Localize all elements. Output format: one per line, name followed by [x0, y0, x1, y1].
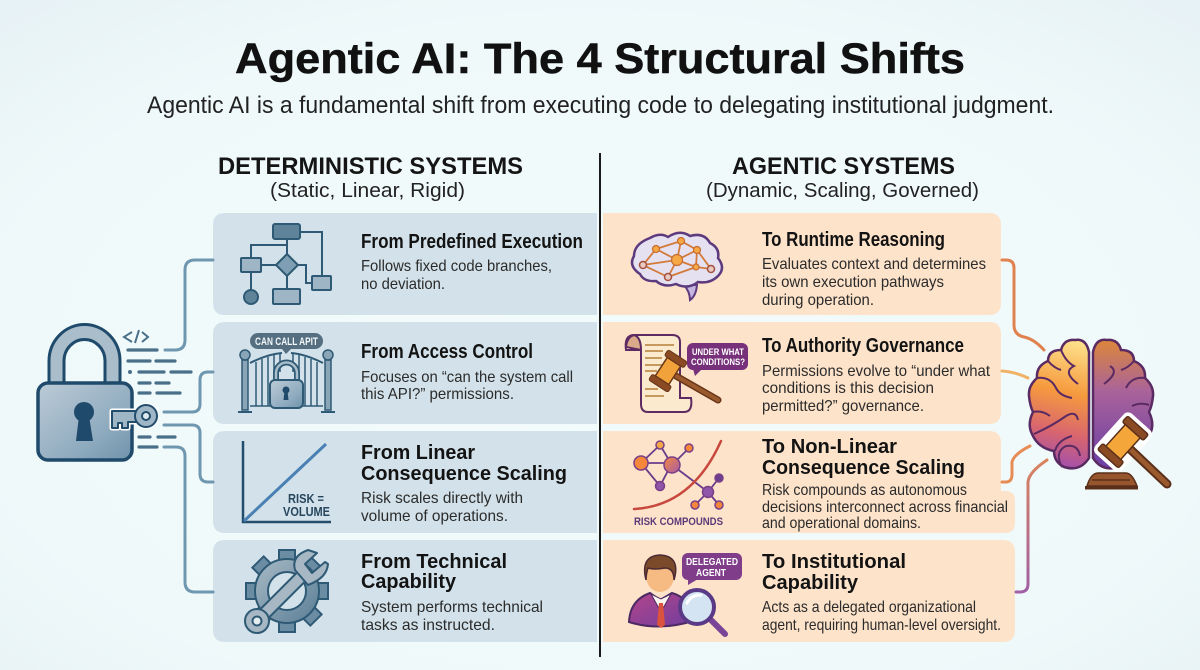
text: runtime reasoning: its own execution pathways: [762, 274, 944, 291]
text: institutional capability: Acts as a delegated organizational: [762, 599, 976, 616]
icon: padlock with key: [38, 332, 157, 460]
text: access control: this API?” permissions.: [361, 386, 514, 403]
text: technical capability: tasks as instructed.: [361, 617, 495, 634]
icon: gate with padlock: CAN CALL APIT: [255, 336, 318, 348]
text: authority governance: conditions is this decision: [762, 380, 934, 397]
text: access control: From Access Control: [361, 341, 533, 363]
icon: key: [112, 405, 157, 428]
subtitle: Agentic AI is a fundamental shift from executing code to delegating institutional judgment.: [147, 92, 1054, 119]
text: linear consequence scaling: volume of operations.: [361, 508, 508, 525]
icon: risk network: RISK COMPOUNDS: [634, 516, 723, 528]
text: non-linear consequence scaling: Consequence Scaling: [762, 457, 965, 479]
text: non-linear consequence scaling: [762, 436, 1008, 532]
icon: flowchart: [241, 224, 331, 304]
text: non-linear consequence scaling: To Non-Linear: [762, 436, 897, 458]
icon: scroll and gavel: CONDITIONS?: [691, 357, 745, 368]
left hemisphere: [1029, 340, 1089, 468]
icon: linear risk chart: [243, 441, 331, 522]
text: access control: Focuses on “can the system call: [361, 369, 573, 386]
connectors: right lines from panels to brain: [1002, 260, 1047, 592]
icon: brain with gavel: [1029, 340, 1167, 490]
icon: delegated agent with magnifier: DELEGATED: [686, 557, 738, 568]
right hemisphere: [1093, 340, 1153, 468]
icon: risk network: [634, 441, 723, 528]
panel: linear consequence scaling: [213, 431, 597, 533]
icon: gate with padlock: [238, 333, 335, 412]
text: technical capability: Capability: [361, 571, 457, 593]
right column heading: AGENTIC SYSTEMS: [732, 153, 955, 180]
panel: access control: [213, 322, 597, 424]
panel: non-linear consequence scaling: [603, 431, 1015, 533]
text: predefined execution: From Predefined Execution: [361, 231, 583, 253]
text: linear consequence scaling: [361, 442, 567, 525]
text: non-linear consequence scaling: and operational domains.: [762, 515, 921, 532]
panel: runtime reasoning: [603, 213, 1001, 315]
text: non-linear consequence scaling: Risk compounds as autonomous: [762, 482, 967, 499]
icon: delegated agent with magnifier: AGENT: [696, 568, 726, 579]
panel: authority governance: [603, 322, 1001, 424]
text: linear consequence scaling: Risk scales directly with: [361, 490, 523, 507]
text: technical capability: From Technical: [361, 551, 507, 573]
connectors: left lines from code to panels: [164, 260, 213, 592]
text: institutional capability: To Institutional: [762, 551, 906, 573]
title: Agentic AI: The 4 Structural Shifts: [235, 35, 965, 83]
panel: technical capability: [213, 540, 597, 642]
gavel: [1085, 410, 1167, 490]
text: predefined execution: Follows fixed code branches,: [361, 258, 552, 275]
left column heading: DETERMINISTIC SYSTEMS: [218, 153, 523, 180]
panel: institutional capability: [603, 540, 1015, 642]
text: predefined execution: [361, 231, 583, 293]
icon: scroll and gavel: [626, 335, 748, 412]
icon: linear risk chart: VOLUME: [283, 505, 330, 519]
text: predefined execution: no deviation.: [361, 276, 445, 293]
text: authority governance: [762, 335, 991, 415]
text: runtime reasoning: [762, 229, 986, 309]
panel: predefined execution: [213, 213, 597, 315]
text: runtime reasoning: Evaluates context and determines: [762, 256, 986, 273]
icon: neural brain: [632, 233, 722, 300]
text: non-linear consequence scaling: decisions interconnect across financial: [762, 499, 1008, 516]
left column heading: (Static, Linear, Rigid): [270, 180, 465, 202]
text: institutional capability: Capability: [762, 572, 859, 594]
text: access control: [361, 341, 573, 403]
icon: delegated agent with magnifier: [629, 553, 742, 634]
text: authority governance: To Authority Governance: [762, 335, 964, 357]
icon: gear and wrench: [245, 550, 328, 633]
text: runtime reasoning: To Runtime Reasoning: [762, 229, 945, 251]
text: runtime reasoning: during operation.: [762, 292, 874, 309]
right column heading: (Dynamic, Scaling, Governed): [706, 180, 979, 202]
right column heading: [706, 153, 979, 202]
code lines beside padlock: [124, 330, 191, 447]
icon: scroll and gavel: UNDER WHAT: [692, 347, 744, 358]
text: technical capability: [361, 551, 543, 634]
text: linear consequence scaling: Consequence Scaling: [361, 463, 567, 485]
text: linear consequence scaling: From Linear: [361, 442, 475, 464]
text: technical capability: System performs technical: [361, 599, 543, 616]
text: institutional capability: agent, requiring human-level oversight.: [762, 617, 1001, 634]
text: authority governance: Permissions evolve to “under what: [762, 363, 991, 380]
left column heading: [218, 153, 523, 202]
icon: linear risk chart: RISK =: [288, 492, 324, 506]
text: authority governance: permitted?” governance.: [762, 398, 924, 415]
text: institutional capability: [762, 551, 1001, 634]
center divider: [599, 153, 601, 657]
